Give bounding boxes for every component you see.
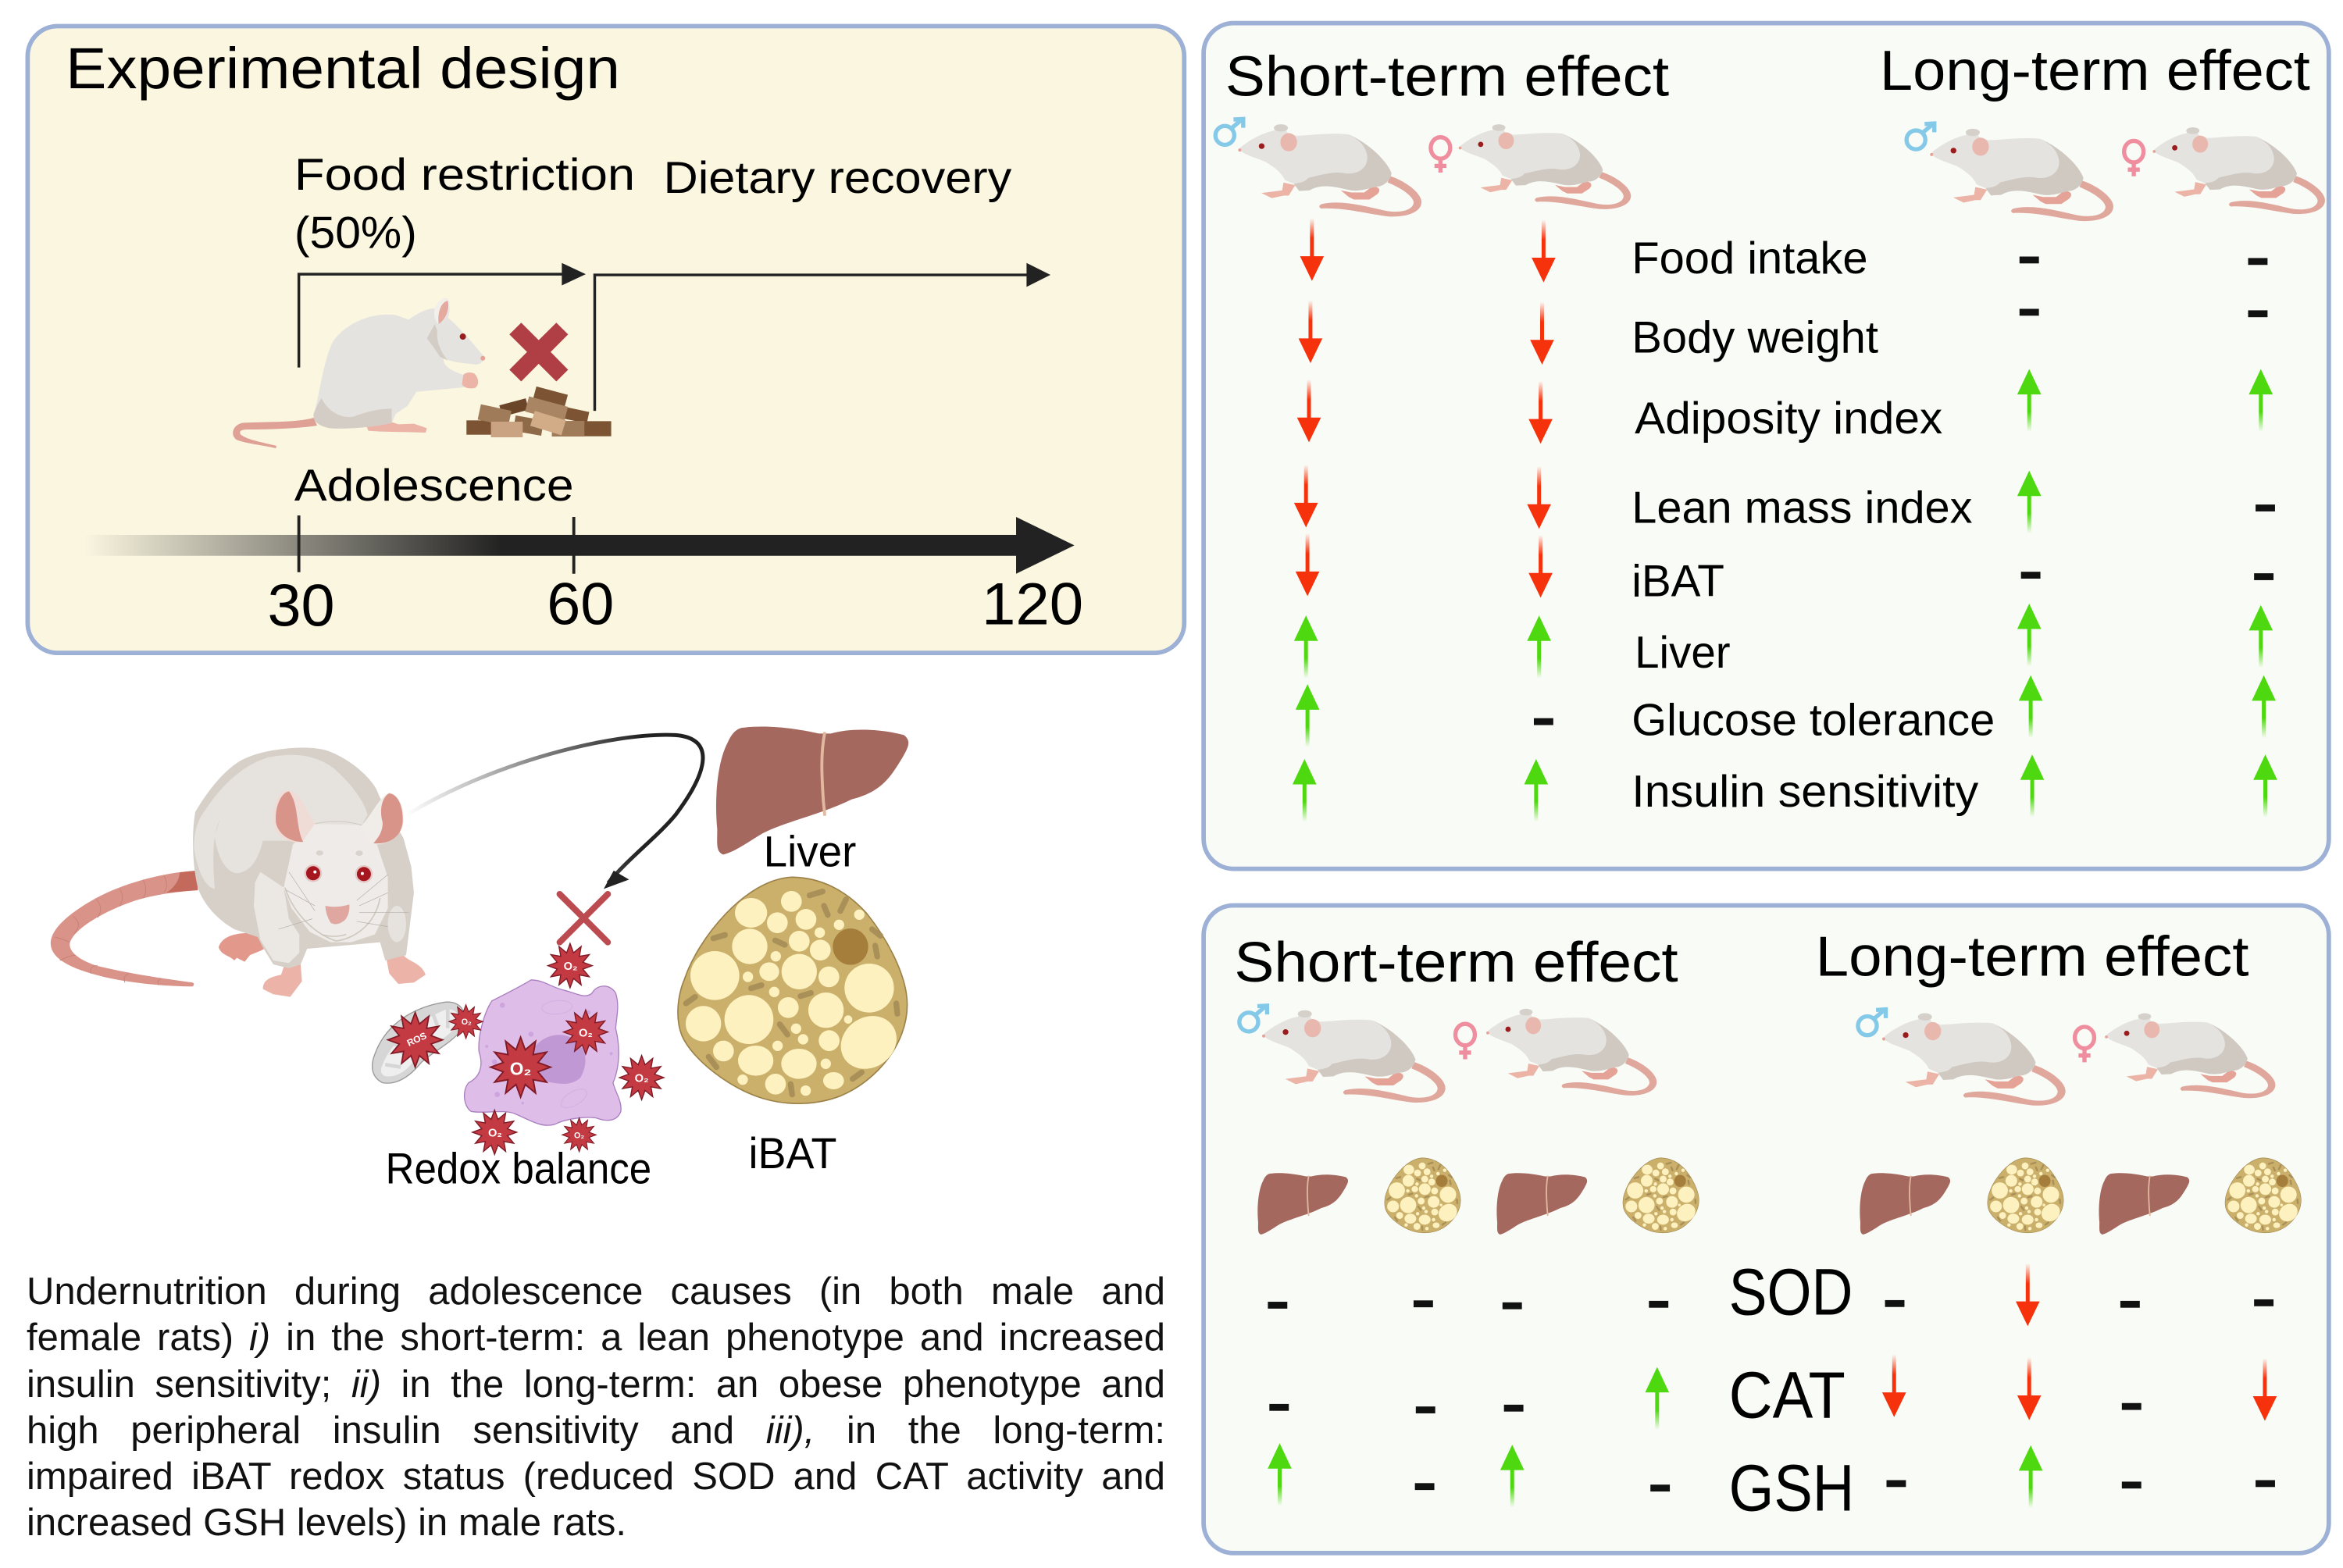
label: 50 percent: (50%) bbox=[294, 208, 417, 258]
panel: redox effects bbox=[1204, 905, 2329, 1553]
arrow: rat to redox balance bbox=[406, 735, 703, 889]
illustration: redox balance bbox=[373, 894, 664, 1154]
icon: male symbol long-term bbox=[1906, 123, 1935, 149]
icon: female symbol long-term bbox=[2124, 141, 2144, 176]
star: superoxide right: O₂ bbox=[635, 1073, 649, 1085]
row label: CAT: CAT bbox=[1729, 1359, 1846, 1432]
star: superoxide near mitochondrion: O₂ bbox=[462, 1017, 472, 1027]
star: superoxide bottom left bbox=[473, 1110, 517, 1154]
star: superoxide bottom right bbox=[562, 1118, 596, 1152]
star: superoxide in cell: O₂ bbox=[510, 1059, 531, 1079]
arrow: food restriction period bbox=[299, 263, 586, 368]
summary paragraph: female rats) i) in the short-term: a lean phenotype and increased bbox=[27, 1317, 1165, 1359]
row label: food intake: Food intake bbox=[1632, 233, 1868, 283]
row label: body weight: Body weight bbox=[1632, 313, 1878, 363]
icon: iBAT tissue bbox=[678, 877, 908, 1103]
row label: insulin sensitivity: Insulin sensitivity bbox=[1632, 767, 1978, 817]
summary paragraph: Undernutrition during adolescence causes (in both male and bbox=[27, 1270, 1165, 1313]
summary paragraph: increased GSH levels) in male rats. bbox=[27, 1502, 626, 1544]
summary paragraph: impaired iBAT redox status (reduced SOD and CAT activity and bbox=[27, 1456, 1165, 1498]
panel: experimental design bbox=[27, 26, 1184, 653]
row label: SOD: SOD bbox=[1729, 1256, 1853, 1329]
icon: thin red cross bbox=[560, 894, 608, 943]
star: ROS: ROS bbox=[405, 1030, 428, 1049]
star: superoxide upper cell bbox=[564, 1010, 608, 1054]
star: superoxide right bbox=[619, 1056, 664, 1099]
indicators: GSH row bbox=[1268, 1443, 2275, 1508]
icon: female symbol short-term bbox=[1456, 1024, 1475, 1060]
icon: rat eating bbox=[233, 298, 485, 448]
star: ROS bbox=[388, 1013, 443, 1067]
star: superoxide top bbox=[548, 943, 592, 988]
arrow: dietary recovery period bbox=[594, 263, 1050, 411]
icon: female symbol short-term bbox=[1431, 137, 1450, 173]
icon: cell bbox=[465, 980, 621, 1125]
tick label: 120: 120 bbox=[982, 572, 1083, 638]
label: adolescence: Adolescence bbox=[294, 461, 574, 511]
star: superoxide bottom left: O₂ bbox=[488, 1128, 502, 1140]
icon: male rat long-term bbox=[1882, 1014, 2066, 1106]
indicators: short-term female bbox=[1525, 219, 1556, 821]
indicators: long-term male bbox=[2017, 257, 2044, 818]
heading: long-term effect: Long-term effect bbox=[1880, 39, 2310, 102]
label: redox balance: Redox balance bbox=[386, 1144, 651, 1192]
icon: food pellets bbox=[466, 387, 612, 437]
summary paragraph: high peripheral insulin sensitivity and iii), in the long-term: bbox=[27, 1409, 1165, 1452]
heading: experimental design: Experimental design bbox=[66, 35, 620, 101]
icon: female rat long-term bbox=[2105, 1014, 2275, 1098]
row label: liver: Liver bbox=[1635, 628, 1731, 678]
indicators: SOD row bbox=[1268, 1263, 2273, 1326]
tick label: 60: 60 bbox=[547, 572, 614, 638]
icon: female symbol long-term bbox=[2075, 1027, 2094, 1062]
timeline arrow bbox=[84, 515, 1075, 574]
row label: lean mass index: Lean mass index bbox=[1632, 483, 1973, 533]
star: superoxide near mitochondrion bbox=[449, 1005, 483, 1039]
star: superoxide in cell bbox=[490, 1037, 551, 1097]
tick label: 30: 30 bbox=[267, 573, 335, 640]
icon: female rat short-term bbox=[1486, 1009, 1657, 1096]
icon: female rat short-term bbox=[1459, 124, 1631, 209]
indicators: short-term male bbox=[1293, 218, 1324, 821]
heading: short-term effect: Short-term effect bbox=[1225, 45, 1669, 108]
icon: male rat short-term bbox=[1262, 1010, 1446, 1103]
label: food restriction: Food restriction bbox=[294, 150, 635, 200]
row label: GSH: GSH bbox=[1729, 1451, 1854, 1524]
indicators: CAT row bbox=[1269, 1354, 2277, 1430]
label: liver: Liver bbox=[764, 828, 856, 876]
heading: short-term effect: Short-term effect bbox=[1234, 931, 1678, 994]
star: superoxide top: O₂ bbox=[564, 960, 578, 973]
row label: glucose tolerance: Glucose tolerance bbox=[1632, 695, 1995, 745]
icons: organ row bbox=[1257, 1158, 2301, 1235]
icon: male symbol long-term bbox=[1858, 1010, 1886, 1035]
label: dietary recovery: Dietary recovery bbox=[663, 153, 1012, 203]
icon: male rat short-term bbox=[1238, 124, 1421, 216]
icon: liver bbox=[716, 727, 908, 854]
icon: red cross bbox=[509, 323, 568, 381]
icon: mitochondrion bbox=[373, 1002, 465, 1083]
star: superoxide bottom right: O₂ bbox=[574, 1131, 584, 1140]
heading: long-term effect: Long-term effect bbox=[1816, 925, 2248, 988]
summary paragraph bbox=[27, 1270, 1165, 1544]
icon: female rat long-term bbox=[2152, 127, 2325, 214]
illustration: large rat bbox=[51, 748, 426, 997]
icon: male rat long-term bbox=[1930, 129, 2113, 221]
icon: male symbol short-term bbox=[1239, 1006, 1267, 1032]
label: iBAT: iBAT bbox=[749, 1129, 836, 1178]
row label: adiposity index: Adiposity index bbox=[1635, 394, 1943, 444]
indicators: long-term female bbox=[2248, 258, 2277, 818]
row label: iBAT: iBAT bbox=[1632, 556, 1724, 606]
panel: metabolic effects bbox=[1204, 23, 2329, 869]
star: superoxide upper cell: O₂ bbox=[579, 1027, 593, 1039]
icon: male symbol short-term bbox=[1215, 119, 1243, 144]
summary paragraph: insulin sensitivity; ii) in the long-term: an obese phenotype and bbox=[27, 1363, 1165, 1406]
